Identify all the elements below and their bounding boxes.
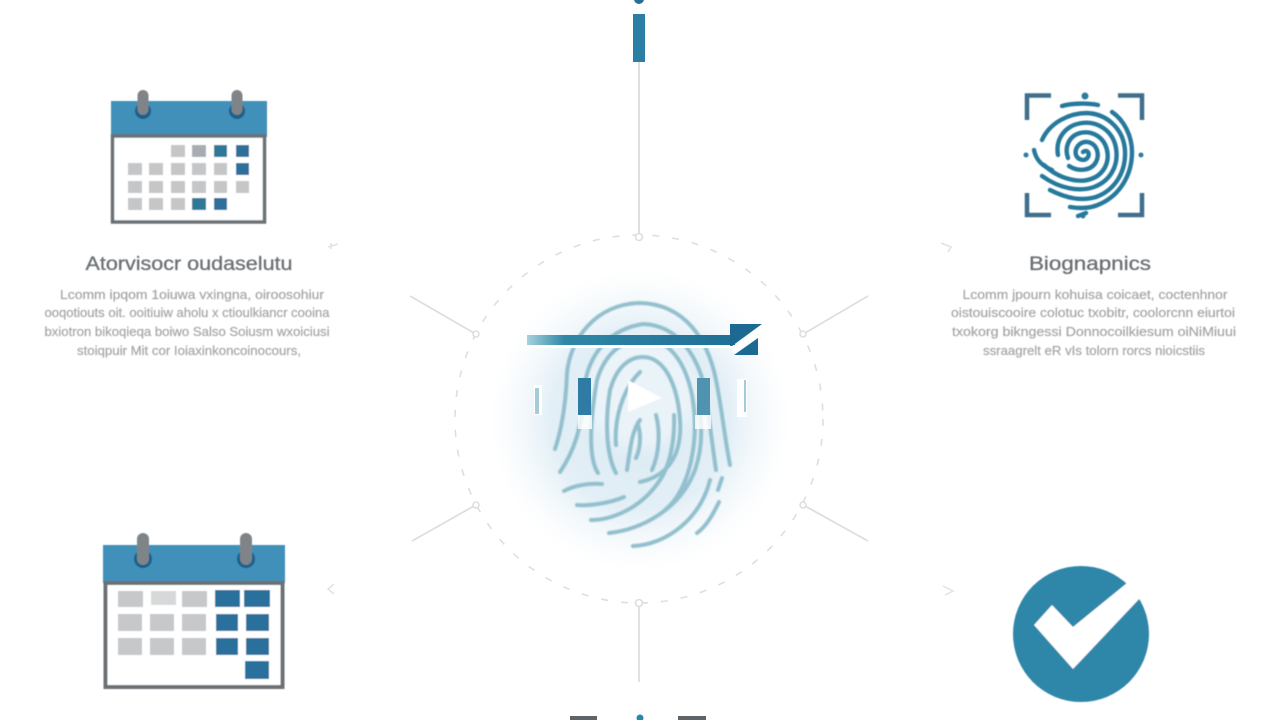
icon: check mark badge — [1013, 566, 1149, 702]
central fingerprint with scanner bar and play button — [490, 270, 790, 570]
icon: fingerprint scan top right — [1024, 92, 1144, 218]
text block: left column — [44, 287, 330, 358]
small corner arrow ticks — [328, 243, 953, 595]
fingerprint ridges — [555, 303, 730, 546]
text block: right column: Lcomm jpourn kohuisa coicaet, coctenhnor — [962, 287, 1228, 302]
heading: right column: Biognapnics — [1029, 254, 1151, 275]
heading: left column: Atorvisocr oudaselutu — [86, 254, 292, 275]
text block: left column: bxiotron bikoqieqa boiwo Salso Soiusm wxoiciusi — [44, 324, 330, 339]
text block: right column: txokorg bikngessi Donnocoilkiesum oiNiMiuui — [952, 324, 1236, 339]
bottom connector: vertical line, dot and grey bars — [570, 606, 706, 720]
play button and side bars — [534, 378, 747, 429]
scan dots — [1024, 92, 1144, 218]
icon: calendar bottom left — [103, 533, 285, 687]
calendar day cells — [118, 590, 270, 679]
scan corner brackets — [1027, 96, 1142, 215]
light highlight around play button — [585, 340, 695, 450]
central dashed ring with spoke connectors — [410, 234, 868, 606]
text block: right column: oistouiscooire colotuc txobitr, coolorcnn eiurtoi — [951, 305, 1235, 320]
text block: left column: stoiqpuir Mit cor Ioiaxinkoncoinocours, — [77, 343, 301, 358]
top connector: blue bar and vertical line — [633, 0, 645, 233]
icon: calendar top left — [111, 90, 267, 222]
calendar day cells — [128, 145, 249, 210]
spiral fingerprint ridges — [1034, 104, 1132, 216]
text block: left column: Lcomm ipqom 1oiuwa vxingna, oiroosohiur — [60, 287, 325, 302]
text block: right column — [951, 287, 1236, 358]
text block: right column: ssraagrelt eR vIs tolorn rorcs nioicstiis — [983, 343, 1205, 358]
scanner bar with arrow flag — [527, 324, 768, 355]
text block: left column: ooqotiouts oit. ooitiuiw aholu x ctioulkiancr cooina — [44, 305, 330, 320]
